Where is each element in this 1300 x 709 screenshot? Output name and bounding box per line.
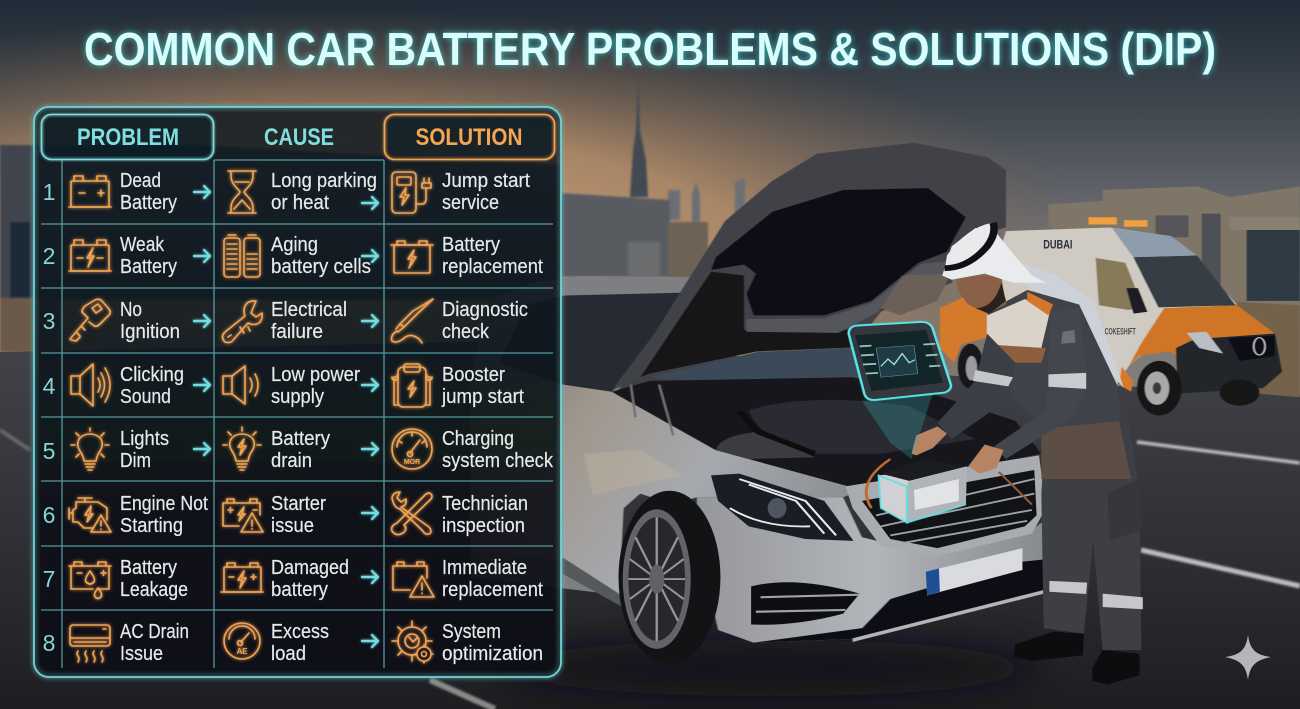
cause text: low power supply: supply: [271, 386, 324, 408]
cause text: starter issue: Starter: [271, 493, 326, 515]
icon: booster pack: [392, 364, 432, 407]
solution text: booster jump start: Booster: [442, 364, 505, 386]
problem text: engine not starting: [120, 493, 208, 537]
problem text: no ignition: Ignition: [120, 321, 180, 343]
arrow: [362, 197, 378, 209]
problem text: dead battery: [120, 170, 177, 214]
row 6: [43, 492, 528, 537]
buildings behind van: [1048, 186, 1300, 397]
solution text: technician inspection: inspection: [442, 515, 525, 537]
front wheel: [619, 491, 720, 664]
solution text: jump start service: service: [442, 192, 499, 214]
watermark sparkle: [1225, 635, 1271, 680]
panel: problem, cause and solution table: [34, 107, 561, 677]
icon: clicking sound speaker: [71, 364, 110, 406]
car windshield under hood: [650, 348, 947, 386]
solution text: diagnostic check: check: [442, 321, 490, 343]
problem text: lights dim: Lights: [120, 428, 169, 450]
scene: illustrated car, van and technician: [470, 143, 1300, 684]
cause text: battery drain: drain: [271, 450, 312, 472]
icon: key: [70, 299, 110, 341]
cause text: excess load: [271, 621, 329, 665]
icon: charging gauge: MOR: [404, 459, 420, 466]
torso and sleeves: [938, 290, 1122, 459]
cause text: electrical failure: Electrical: [271, 299, 347, 321]
problem text: weak battery: Weak: [120, 234, 165, 256]
arrow: [362, 443, 378, 455]
van: [940, 227, 1282, 415]
scene: illustrated car, van and technician: COKESHIFT: [1105, 327, 1136, 337]
solution text: jump start service: [442, 170, 530, 214]
solution text: booster jump start: jump start: [441, 386, 524, 408]
number 1: 1: [43, 179, 55, 205]
battery: [866, 459, 1032, 523]
icon: charging gauge: [392, 429, 432, 469]
problem text: battery leakage: Leakage: [120, 579, 188, 601]
open bonnet: [612, 143, 1006, 390]
problem text: ac drain issue: [120, 621, 189, 665]
scene: dubai skyline: [560, 75, 745, 282]
car grille: [845, 455, 1046, 556]
icon: dead battery: [69, 176, 111, 207]
icon: battery drain bulb: [223, 427, 261, 470]
solution text: immediate replacement: [442, 557, 543, 601]
cause text: aging battery cells: Aging: [271, 234, 318, 256]
header: problem: [42, 114, 214, 160]
icon: AC unit: [70, 625, 110, 662]
cause text: damaged battery: [271, 557, 349, 601]
icon: starter issue: [223, 499, 263, 532]
arrow: [194, 250, 210, 262]
problem text: dead battery: Battery: [120, 192, 177, 214]
keffiyeh and agal: [942, 223, 1046, 283]
problem text: clicking sound: Sound: [120, 386, 171, 408]
icon: jump start charger: [392, 172, 431, 213]
hologram diagnostic tablet: [849, 322, 951, 459]
problem text: lights dim: Dim: [120, 450, 151, 472]
arrow: [194, 315, 210, 327]
cause text: electrical failure: failure: [271, 321, 323, 343]
icon: excess load gauge: AE: [236, 647, 248, 656]
solution text: technician inspection: [442, 493, 528, 537]
cause text: battery drain: Battery: [271, 428, 330, 450]
icon: engine warning: [69, 498, 111, 532]
solution text: charging system check: Charging: [442, 428, 514, 450]
header: solution: [384, 114, 554, 160]
icon: battery leakage: [69, 562, 111, 598]
number 8: 8: [43, 630, 55, 656]
solution text: booster jump start: [441, 364, 524, 408]
icon: weak battery: [69, 240, 111, 271]
solution text: immediate replacement: Immediate: [442, 557, 527, 579]
arrow: [362, 379, 378, 391]
icon: dim bulb: [71, 428, 109, 470]
problem text: weak battery: [120, 234, 177, 278]
cause text: excess load: load: [271, 643, 306, 665]
solution text: technician inspection: Technician: [442, 493, 528, 515]
number 2: 2: [43, 243, 55, 269]
cause text: long parking or heat: or heat: [271, 192, 329, 214]
solution text: jump start service: Jump start: [442, 170, 530, 192]
cause text: damaged battery: Damaged: [271, 557, 349, 579]
problem text: clicking sound: Clicking: [120, 364, 184, 386]
cause text: low power supply: [271, 364, 360, 408]
lane markings: [0, 430, 1300, 709]
solution text: diagnostic check: Diagnostic: [442, 299, 528, 321]
problem text: battery leakage: [120, 557, 188, 601]
problem text: no ignition: No: [120, 299, 142, 321]
solution text: system optimization: System: [442, 621, 501, 643]
solution text: diagnostic check: [442, 299, 528, 343]
problem text: lights dim: [120, 428, 169, 472]
cause text: long parking or heat: Long parking: [271, 170, 377, 192]
problem text: dead battery: Dead: [120, 170, 161, 192]
problem text: engine not starting: Starting: [120, 515, 183, 537]
problem text: ac drain issue: Issue: [120, 643, 163, 665]
icon: battery replacement: [391, 241, 433, 273]
icon: hourglass: [228, 171, 256, 213]
solution text: system optimization: optimization: [442, 643, 543, 665]
number 5: 5: [43, 438, 55, 464]
van lettering: [1043, 238, 1136, 337]
number 3: 3: [43, 308, 55, 334]
row 7: [43, 557, 543, 601]
table grid: [41, 160, 553, 668]
left building: [0, 145, 560, 352]
lower air intake: [751, 582, 860, 625]
number 4: 4: [43, 373, 56, 399]
row 8: [43, 621, 543, 665]
icon: diagnostic probe: [392, 299, 433, 343]
number 7: 7: [43, 566, 55, 592]
number plate: [926, 548, 1022, 595]
header: solution: SOLUTION: [416, 124, 522, 151]
hands: [912, 426, 1004, 474]
icon: crossed tools: [392, 492, 432, 535]
solution text: immediate replacement: replacement: [442, 579, 543, 601]
problem text: battery leakage: Battery: [120, 557, 177, 579]
road surface: [0, 340, 1300, 709]
icon: damaged battery: [221, 563, 263, 592]
car front bumper: [697, 497, 1048, 643]
arrow: [362, 250, 378, 262]
cause text: excess load: Excess: [271, 621, 329, 643]
problem text: no ignition: [120, 299, 180, 343]
cause text: low power supply: Low power: [271, 364, 360, 386]
technician: [912, 223, 1143, 684]
cause text: damaged battery: battery: [271, 579, 328, 601]
face: [955, 275, 1006, 314]
solution text: battery replacement: Battery: [442, 234, 500, 256]
icon: aging battery cells: [224, 235, 260, 277]
cause text: electrical failure: [271, 299, 347, 343]
van lettering: DUBAI: [1043, 238, 1072, 252]
solution text: battery replacement: replacement: [442, 256, 543, 278]
cause text: starter issue: issue: [271, 515, 314, 537]
solution text: system optimization: [442, 621, 543, 665]
row 4: [43, 364, 524, 408]
arrow: [362, 507, 378, 519]
icon: wrench: [222, 301, 262, 343]
row 1: [43, 170, 530, 214]
cause text: aging battery cells: battery cells: [271, 256, 371, 278]
header: cause: CAUSE: [264, 124, 334, 151]
row 5: [43, 427, 554, 472]
arrow: [194, 443, 210, 455]
arrow: [194, 186, 210, 198]
header: problem: PROBLEM: [77, 124, 179, 151]
arrow: [362, 635, 378, 647]
keffiyeh back drape: [997, 254, 1124, 388]
car headlight: [711, 474, 854, 541]
van roof beacons: [1089, 217, 1148, 227]
solution text: battery replacement: [442, 234, 543, 278]
cause text: starter issue: [271, 493, 326, 537]
row 2: [43, 234, 543, 278]
problem text: ac drain issue: AC Drain: [120, 621, 189, 643]
icon: gears: [392, 621, 433, 663]
engine bay: [612, 377, 1041, 490]
solution text: charging system check: system check: [442, 450, 554, 472]
problem text: engine not starting: Engine Not: [120, 493, 208, 515]
number 6: 6: [43, 502, 55, 528]
cause text: aging battery cells: [271, 234, 371, 278]
legs and boots: [1013, 410, 1143, 684]
problem text: clicking sound: [120, 364, 184, 408]
cause text: long parking or heat: [271, 170, 377, 214]
icon: immediate replacement warning: [393, 562, 434, 597]
problem text: weak battery: Battery: [120, 256, 177, 278]
arrow: [362, 315, 378, 327]
cause text: battery drain: [271, 428, 330, 472]
arrow: [362, 571, 378, 583]
car ground shadow: [500, 640, 1040, 696]
icon: low power speaker: [223, 366, 258, 404]
arrow: [194, 379, 210, 391]
car rear and cabin: [470, 276, 862, 606]
solution text: charging system check: [442, 428, 554, 472]
row 3: [43, 299, 528, 343]
icon: excess load gauge: [224, 623, 260, 659]
